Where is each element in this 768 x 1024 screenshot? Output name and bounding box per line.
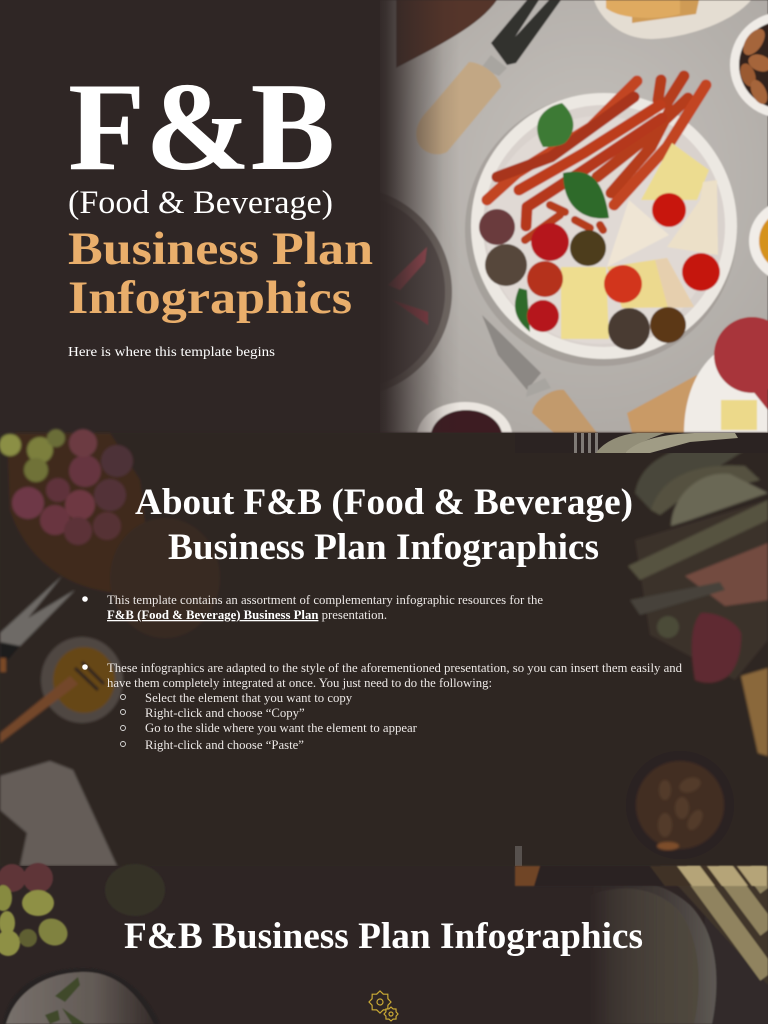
cheese wedges: [561, 143, 718, 339]
fig plate: [386, 197, 453, 386]
tagline: Here is where this template begins: [68, 345, 275, 360]
bullet list: F&B (Food & Beverage) Business Plan presentation.: [107, 608, 387, 622]
subheading: Food & Beverage: (Food & Beverage): [68, 185, 333, 221]
pear slices: [628, 440, 768, 580]
plate shadow: [465, 94, 737, 366]
faded food background: [0, 429, 768, 866]
bullet list: Right-click and choose “Paste”: [145, 738, 304, 752]
almond bowl: [626, 751, 734, 859]
prosciutto: [685, 543, 768, 606]
faded food right: [590, 866, 768, 1024]
knife: [482, 315, 597, 433]
salami plate: [684, 317, 768, 433]
green bowl: [105, 864, 165, 916]
top edge image strip: [515, 866, 768, 886]
tomatoes: [479, 193, 720, 350]
heading: About: [135, 482, 633, 568]
background base: [0, 866, 768, 1024]
fork: [416, 0, 561, 154]
white cheese: [0, 761, 117, 866]
soup bowl: [590, 881, 716, 1024]
heading: F&B: F&B: [68, 58, 335, 197]
lighter image strip top: [515, 433, 768, 453]
heading: Business Plan Infographics: Infographics: [68, 272, 352, 324]
heading: Business Plan Infographics: [68, 223, 373, 324]
panel: title slide: [68, 0, 768, 433]
bullet list: Select the element that you want to copy: [145, 691, 353, 705]
green grapes: [0, 885, 72, 956]
plate: [471, 93, 737, 359]
photo: food platter: [384, 0, 768, 433]
wooden board top left: [396, 0, 497, 68]
bullet list: Go to the slide where you want the element to appear: [145, 721, 418, 735]
bottom strip mark: [515, 846, 522, 866]
panel: about slide: [0, 429, 768, 866]
breadsticks: [679, 865, 768, 984]
pear wedge and fig: [630, 582, 741, 683]
cracker plate: [594, 0, 751, 39]
purple grapes: [0, 863, 53, 893]
heading: About: About F&B (Food & Beverage): [135, 482, 633, 523]
grape basket: [0, 429, 150, 592]
bowl with herbs: [3, 968, 160, 1024]
bullet list: This template contains an assortment of complementary infographic resources for the: [107, 593, 543, 607]
almond bowl: [730, 12, 768, 118]
small wooden bowl: [110, 518, 220, 638]
faded food left: [0, 863, 165, 1024]
sausages: [487, 76, 706, 240]
honey bowl: [749, 200, 768, 282]
bullet list: [82, 593, 683, 752]
panel: infographics title slide: [0, 863, 768, 1024]
heading: About: Business Plan Infographics: [168, 527, 599, 568]
basil leaves: [515, 103, 609, 332]
fork: [0, 576, 75, 672]
heading: F&B Business Plan Infographics: F&B Business Plan Infographics: [124, 916, 643, 957]
honey bowl: [0, 637, 123, 743]
bullet list: Right-click and choose “Copy”: [145, 706, 305, 720]
bullet list: These infographics are adapted to the style of the aforementioned presentation, so you can insert them easily and: [107, 661, 683, 675]
bullet list: have them completely integrated at once. You just need to do the following:: [107, 676, 492, 690]
dark fade over photo: [376, 0, 460, 433]
crackers: [741, 668, 768, 756]
table: [705, 886, 768, 1024]
wood board: [627, 375, 697, 433]
heading: Business Plan Infographics: Business Plan: [68, 223, 373, 275]
icon: gears: [369, 991, 398, 1021]
jam bowl: [417, 402, 512, 433]
board behind fruit: [635, 500, 768, 680]
